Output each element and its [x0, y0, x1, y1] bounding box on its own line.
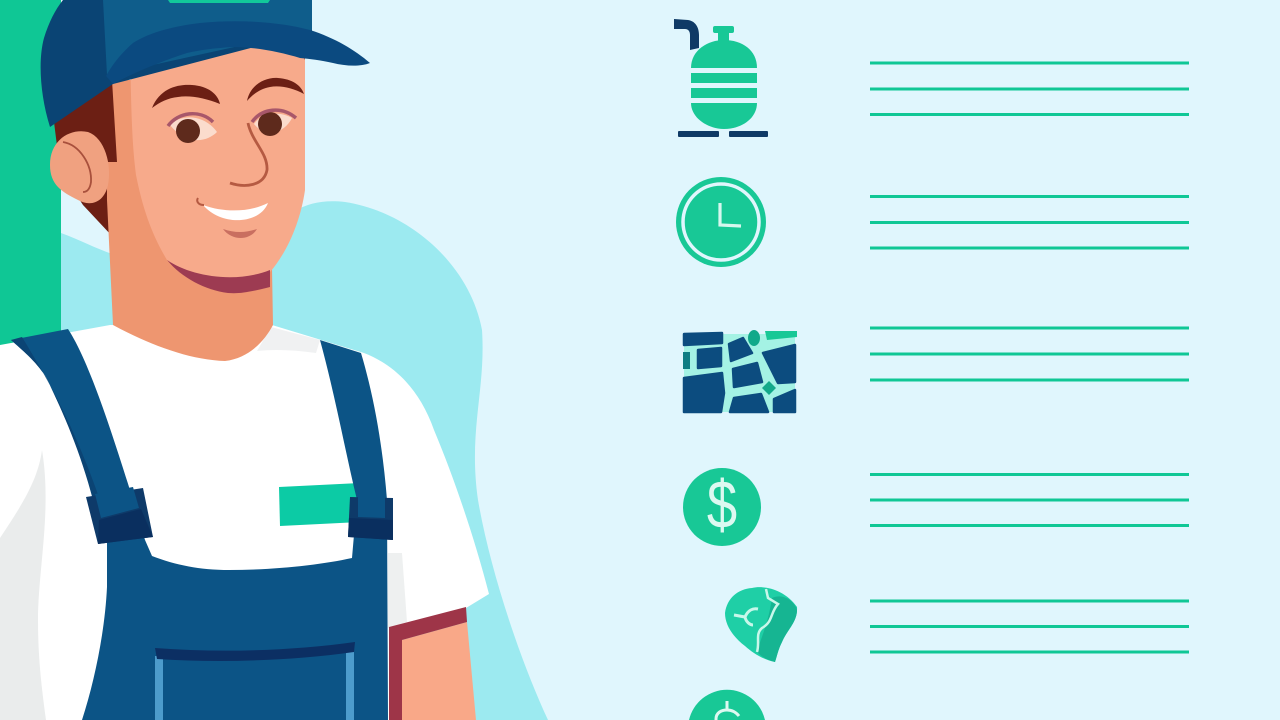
pocket seams	[155, 652, 354, 720]
strap shadow	[11, 337, 100, 500]
white t-shirt	[0, 325, 489, 720]
neck	[107, 80, 273, 361]
icon: map	[683, 330, 797, 412]
neck shadow	[167, 260, 270, 293]
checklist placeholder lines 5	[870, 601, 1189, 652]
cap	[41, 0, 370, 127]
left buckle	[86, 487, 153, 544]
icon: cracked leaf	[725, 587, 797, 662]
checklist placeholder lines 3	[870, 328, 1189, 380]
pocket top	[155, 642, 355, 661]
right eye	[252, 110, 296, 136]
hair	[54, 50, 305, 236]
right buckle	[348, 497, 393, 540]
forearm	[389, 607, 476, 720]
nose	[230, 123, 267, 185]
icon: cropped coin at bottom edge	[689, 690, 765, 720]
left eye	[168, 114, 217, 143]
checklist placeholder lines 4	[870, 474, 1189, 526]
icon: water tank	[674, 19, 768, 137]
lower lip	[223, 229, 257, 238]
green background bar	[0, 0, 61, 345]
checklist placeholder lines 2	[870, 196, 1189, 248]
face	[130, 40, 305, 293]
icon: clock	[676, 177, 766, 267]
right eyebrow	[247, 78, 304, 101]
smile	[203, 203, 268, 220]
technician figure	[0, 0, 489, 720]
icon: dollar coin	[683, 467, 761, 546]
icon: dollar coin: $	[707, 467, 737, 543]
ear	[50, 131, 109, 203]
sleeve cuff	[389, 607, 467, 720]
left eyebrow	[152, 85, 220, 108]
overalls	[11, 329, 393, 720]
aqua background blob	[61, 201, 548, 720]
name badge	[279, 483, 360, 526]
bib and straps	[11, 329, 388, 720]
checklist placeholder lines 1	[870, 63, 1189, 114]
